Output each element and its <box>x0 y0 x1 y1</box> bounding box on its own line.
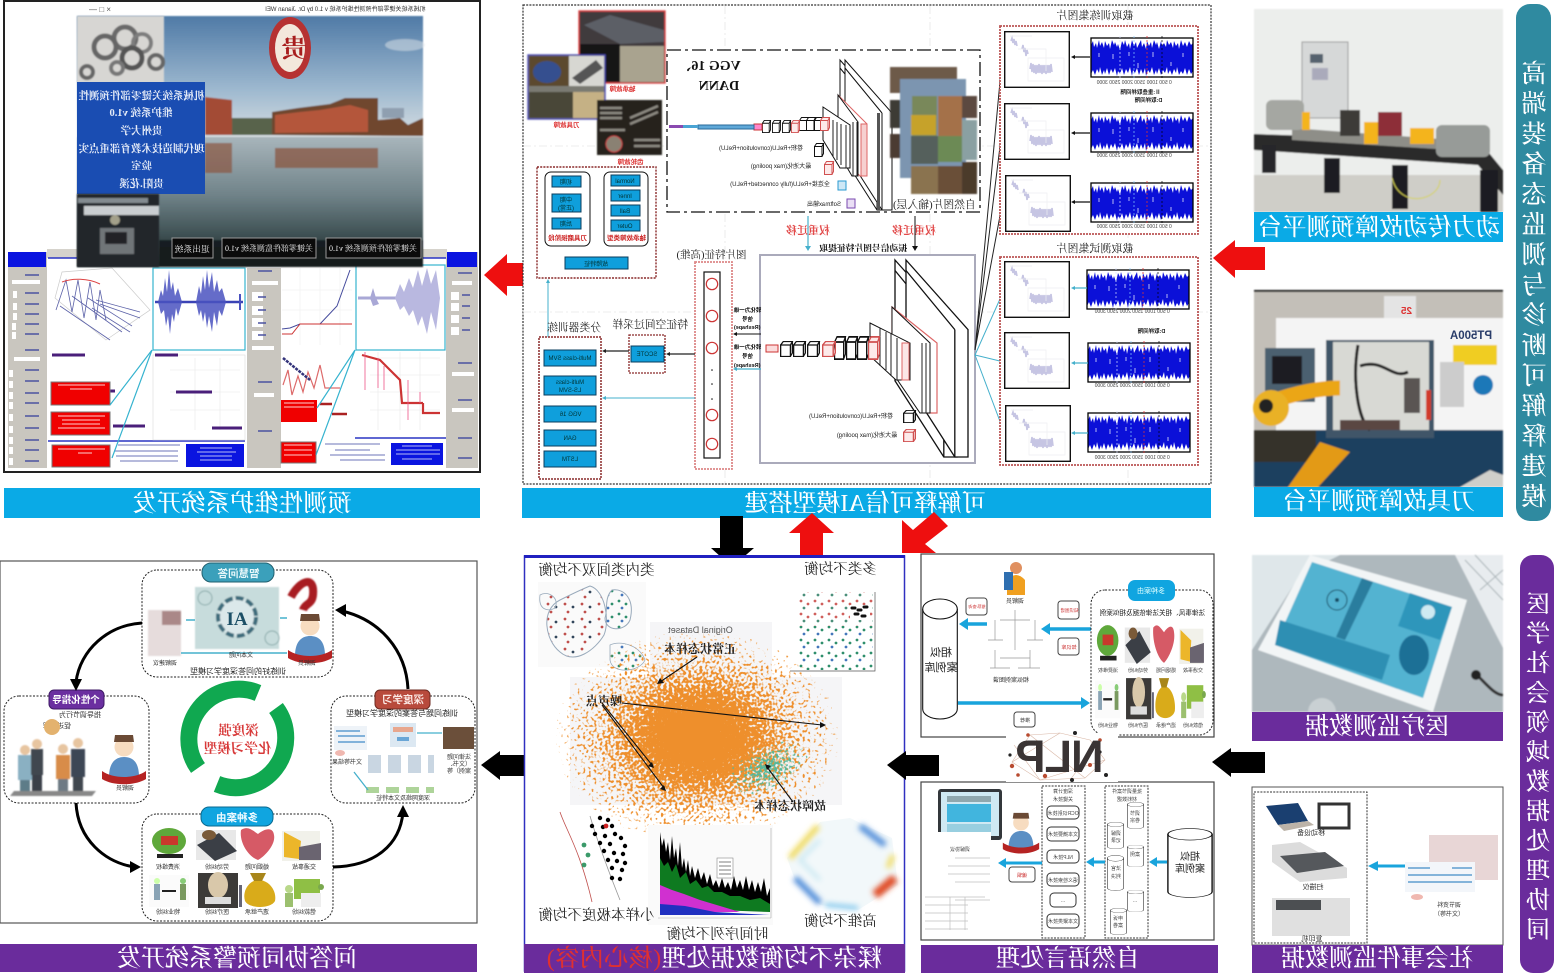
sidebar: equipment monitoring: 测 <box>1521 241 1546 269</box>
reshape labels: 信号 <box>741 352 753 360</box>
title block: 贵州大学 <box>120 124 162 137</box>
legend: 卷积+ReLU(convolution+ReLU) <box>809 412 893 420</box>
case database cylinder: 相似 <box>1180 850 1200 863</box>
smart Q&A box: 训练好的问答深度学习模型 <box>190 666 286 676</box>
bearing photo <box>77 16 164 83</box>
sidebar: equipment monitoring: 断 <box>1521 332 1546 360</box>
model name <box>677 59 741 94</box>
panel: social event data <box>1252 787 1503 945</box>
scatter plot orange samples <box>555 631 839 843</box>
training set panel: D:取样间隔 <box>1134 96 1162 104</box>
scatter plot background: Original Dataset <box>668 625 733 635</box>
device box: 扫描仪 <box>1302 882 1324 891</box>
model name: VGG 16、 <box>677 59 741 74</box>
remaining life plots <box>50 352 445 440</box>
subplot labels <box>538 906 877 943</box>
cycle arrows <box>70 604 409 873</box>
fault label group: (正常) <box>558 204 574 212</box>
reshape labels: 转化为一维 <box>733 343 761 351</box>
mediator icon <box>1004 562 1025 605</box>
weight transfer labels: 振动信号图片特征提取 <box>819 242 907 253</box>
small sample clusters <box>560 812 627 902</box>
smart Q&A box: 调解员 <box>298 659 316 667</box>
test set panel <box>1000 241 1198 465</box>
smart Q&A box: 智慧问答 <box>217 567 259 580</box>
multiple case types box: 劳动纠纷 <box>205 863 229 871</box>
multi-class scatter <box>790 590 875 671</box>
device box <box>1254 792 1367 943</box>
personalised guidance box: 个性化指导 <box>52 694 100 706</box>
batch data column: 卷宗 <box>1130 817 1140 824</box>
classifier training: Multi-class SVM <box>548 356 592 362</box>
fan connectors to test set <box>975 290 1004 432</box>
scatter annotations: 噪声点 <box>585 693 622 708</box>
sidebar: medical social data: 理 <box>1526 858 1550 884</box>
banner: explainable AI: 可解释可信AI模型搭建 <box>744 490 986 517</box>
smart Q&A box <box>142 563 333 677</box>
case types box: 交通事故 <box>1183 667 1203 674</box>
banner: medical data: 医疗监测数据 <box>1305 713 1449 740</box>
batch data column: 批量调节案件 <box>1112 788 1142 795</box>
sidebar: medical social data: 医 <box>1526 591 1550 618</box>
batch data column: 申诉 <box>1113 915 1123 922</box>
mediation documents: 调节资料 <box>1437 901 1461 909</box>
deep learning box: 深度网络及文本特征 <box>376 794 430 802</box>
sidebar: equipment monitoring: 态 <box>1520 181 1546 209</box>
device box: 移动设备 <box>1297 828 1325 837</box>
weight transfer labels <box>786 216 936 253</box>
sidebar: equipment monitoring: 端 <box>1521 90 1546 118</box>
signal network box <box>760 255 975 463</box>
menu buttons: 关键零部件监测系统 v1.0 <box>225 243 313 253</box>
central reinforcement learning cycle: 深度强 <box>217 722 259 738</box>
batch data column: 材料数据 <box>1117 796 1137 803</box>
fault photo captions: 齿轮故障 <box>617 157 644 166</box>
sidebar: medical social data: 协 <box>1525 887 1550 914</box>
sidebar: medical social data: 会 <box>1526 680 1550 707</box>
window controls: × □ — <box>89 5 111 14</box>
banner: power transmission platform: 动力传动故障预测平台 <box>1258 214 1500 241</box>
case types box: 多种案由 <box>1137 586 1165 595</box>
title block: 贵阳.花溪 <box>119 177 164 190</box>
case database cylinder: 案例库 <box>1175 862 1205 875</box>
title block: 现代制造技术教育部重点实 <box>78 142 204 155</box>
case types box: 法律事风、相关法律依据及相似案例 <box>1099 608 1205 617</box>
smart Q&A box: 调解建议 <box>153 659 177 667</box>
banner: explainable AI <box>522 488 1211 518</box>
image feature column: 图片特征(高维) <box>676 248 746 261</box>
classifier training: LS-SVM <box>559 388 581 394</box>
legend: 全连接+ReLU(fully connected+ReLU) <box>730 180 830 188</box>
photo: medical tablet <box>1252 555 1503 726</box>
scatter plot fault samples <box>720 728 816 808</box>
test set panel: 0 500 1000 1500 2000 2500 3000 <box>1094 309 1170 315</box>
batch data column: 记录 <box>1111 837 1121 844</box>
SCOTE oversampling: SCOTE <box>637 352 657 358</box>
sidebar: equipment monitoring: 备 <box>1521 151 1546 179</box>
mediation documents: （文书等） <box>1434 910 1464 918</box>
arrow: black down <box>711 516 754 567</box>
subplot labels: 小样本极度不均衡 <box>538 906 654 924</box>
sidebar: medical social data: 处 <box>1525 828 1550 855</box>
panel: explainable AI model <box>523 5 1211 484</box>
icon: university seal <box>269 17 311 79</box>
personalised guidance box: 指导调节行为 <box>59 710 101 719</box>
test set panel: 0 500 1000 1500 2000 2500 3000 <box>1094 455 1170 461</box>
training set panel: 0 500 1000 1500 2000 2500 3000 <box>1096 153 1172 159</box>
banner: core content: 糅杂不均衡数据处理(核心内容) <box>546 945 882 972</box>
tag boxes: 知识库 <box>1061 644 1077 651</box>
deep computing techniques: 深度计算 <box>1053 788 1073 795</box>
sidebar: medical social data: 领 <box>1525 709 1550 736</box>
sidebar: equipment monitoring: 与 <box>1521 271 1546 299</box>
inter/intra class clusters <box>538 582 646 670</box>
mediation documents <box>1405 835 1498 918</box>
scatter plot background <box>570 622 842 805</box>
arrow: black to NLP <box>1212 748 1265 777</box>
sidebar: equipment monitoring: 释 <box>1521 422 1546 450</box>
fan connectors to datasets <box>975 60 1002 350</box>
arrow: red to AI model <box>1213 240 1265 278</box>
fault photo captions <box>553 84 644 166</box>
window title: 机械系统关键零部件预测性维护系统 v 1.0 by Dr. Jianan WEI <box>265 5 426 13</box>
banner: tool platform: 刀具故障预测平台 <box>1283 488 1475 515</box>
training set panel: Ⅱ:重叠取样间隔 <box>1120 88 1161 96</box>
reshape labels: 信号 <box>741 315 753 323</box>
classifier training: GAN <box>563 436 577 442</box>
case types box: 劳动纠纷 <box>1128 667 1148 674</box>
sidebar: medical social data: 域 <box>1526 739 1550 766</box>
generated documents <box>925 832 991 936</box>
training set panel: 0 500 1000 1500 2000 2500 3000 <box>1096 224 1172 230</box>
classifier training: 分类器训练 <box>546 320 601 334</box>
legend: 最大池化(max pooling) <box>837 431 897 439</box>
tag boxes: 推荐 <box>1020 717 1030 724</box>
menu buttons: 关键零部件预测系统 v1.0 <box>329 243 417 253</box>
fault label group: 中期 <box>560 196 572 204</box>
batch data column: 调节 <box>1130 810 1140 817</box>
blue flow arrows <box>998 857 1167 868</box>
multiple case types box: 物业纠纷 <box>156 908 180 916</box>
multiple case types box: 遗产继承 <box>245 908 269 916</box>
arrow: red diagonal <box>902 512 948 553</box>
blue flow arrows <box>958 618 1091 709</box>
trend plot <box>281 268 355 350</box>
machine model label: 25 <box>1400 306 1412 317</box>
scatter annotations <box>585 641 826 813</box>
title block: 维护系统 v1.0 <box>110 106 172 119</box>
title block: 机械系统关键零部件预测性 <box>78 89 204 102</box>
fault label group: 轴承故障类型 <box>606 233 646 242</box>
caption: natural images: 自然图片(输入层) <box>893 197 976 211</box>
case types box: 医疗纠纷 <box>1128 722 1148 729</box>
banner: Q&A early warning <box>0 944 477 972</box>
machine model label: PT500A <box>1450 330 1492 342</box>
panel: predictive maintenance system screenshots <box>4 1 480 472</box>
photo: tool fault test machine <box>1253 290 1503 487</box>
sidebar: equipment monitoring: 可 <box>1521 362 1546 390</box>
flow diagram <box>988 610 1043 668</box>
sidebar: equipment monitoring: 高 <box>1521 60 1546 88</box>
classifier training: VGG 16 <box>559 412 581 418</box>
banner: NLP: 自然语言处理 <box>996 945 1140 972</box>
case database cylinder <box>1168 829 1212 897</box>
legend: 最大池化(max pooling) <box>751 162 811 170</box>
fault label group: Inner <box>618 194 632 200</box>
deep computing techniques: … <box>1060 898 1066 904</box>
deep computing techniques: 文本摘要技术 <box>1048 831 1078 838</box>
time series chart <box>648 825 773 925</box>
photo: power transmission test rig <box>1254 9 1503 212</box>
fault label group: Ball <box>620 209 630 215</box>
legend: 卷积+ReLU(convolution+ReLU) <box>719 144 803 152</box>
subplot labels: 时间序列不均衡 <box>666 926 768 943</box>
sidebar: equipment monitoring: 模 <box>1521 483 1546 511</box>
smart Q&A box: 文本问题 <box>229 651 253 659</box>
machine model label <box>1400 306 1492 342</box>
legend <box>809 410 915 442</box>
multiple case types box: 交通事故 <box>292 863 316 871</box>
classifier training <box>539 320 601 479</box>
panel: NLP lower <box>921 782 1214 940</box>
banner: predictive maintenance: 预测性维护系统开发 <box>132 490 352 517</box>
classifier training: LSTM <box>562 457 578 463</box>
fault photo captions: 刀具故障 <box>553 120 580 129</box>
fault label group <box>537 167 656 278</box>
arrow: black to imbalance panel <box>887 751 939 780</box>
panel: imbalanced data processing <box>524 555 905 971</box>
monitor <box>938 789 1002 840</box>
3D surface plot <box>55 268 150 340</box>
tag boxes: 知识图谱 <box>1060 607 1078 614</box>
menu buttons <box>172 238 421 258</box>
software window: lower analysis screen <box>7 240 478 470</box>
legend: Softmax输出 <box>807 200 841 208</box>
case types box: 婚姻问题 <box>1156 667 1176 674</box>
weight transfer labels: 权重迁移 <box>786 223 830 237</box>
test set panel: 0 500 1000 1500 2000 2500 3000 <box>1094 383 1170 389</box>
deep learning box: （文书、 <box>447 760 471 768</box>
deep computing techniques: 语义检索技术 <box>1048 877 1078 884</box>
batch data column: … <box>1132 898 1138 904</box>
batch data column: 调解 <box>1111 830 1121 837</box>
sidebar: equipment monitoring: 装 <box>1521 120 1546 148</box>
personalised guidance box: 促进调解 <box>43 721 71 730</box>
arrow: black to Q&A <box>481 751 533 780</box>
smart Q&A box: IA <box>226 609 248 630</box>
sidebar: equipment monitoring: 诊 <box>1521 302 1546 330</box>
software window: splash screen <box>77 5 426 267</box>
sidebar: medical social data <box>1520 555 1554 973</box>
sidebar: equipment monitoring: 解 <box>1521 392 1546 420</box>
case types box <box>1091 580 1213 735</box>
personalised guidance box: 调解员 <box>116 784 134 792</box>
SCOTE oversampling <box>546 279 695 400</box>
lathe photo <box>77 194 159 267</box>
reshape labels <box>733 306 761 371</box>
sidebar: equipment monitoring: 建 <box>1521 453 1546 481</box>
fault label group: Outer <box>617 224 633 230</box>
deep computing techniques: OCR识别技术 <box>1047 810 1079 817</box>
caption: case graph: 相似案例图谱 <box>993 676 1029 684</box>
multiple case types box: 医疗纠纷 <box>205 908 229 916</box>
vibration signal plot <box>153 268 245 350</box>
mediator icon: 调解员 <box>1006 597 1024 605</box>
batch data column: 案卷 <box>1113 922 1123 929</box>
deep computing techniques <box>1042 786 1085 938</box>
high-dimensional manifold <box>787 818 898 910</box>
red warning boxes <box>51 382 317 467</box>
campus photo <box>77 16 425 267</box>
sidebar: medical social data: 学 <box>1526 621 1550 648</box>
fault label group: 初期 <box>560 178 572 186</box>
case types box: 遗产继承 <box>1156 722 1176 729</box>
deep learning box: 法律问题 <box>447 753 471 761</box>
blue info boxes <box>186 443 443 467</box>
network layers <box>669 60 892 210</box>
zoom connector lines <box>110 350 355 458</box>
banner: medical data <box>1252 712 1503 741</box>
training set panel <box>1000 8 1198 234</box>
menu buttons: 退出系统 <box>174 243 210 254</box>
scatter annotations: 正常状态样本 <box>664 641 736 656</box>
banner: NLP <box>921 945 1218 973</box>
reshape labels: (Reshape) <box>734 325 760 331</box>
batch data column: 法官 <box>1111 865 1121 872</box>
multiple case types box: 消费维权 <box>156 863 180 871</box>
deep learning box: 训练问题与答案的深度学习模型 <box>346 708 458 718</box>
VGG DANN network <box>667 50 980 212</box>
subplot labels: 高维不均衡 <box>804 912 877 930</box>
training set panel: 截取训练集图片 <box>1056 8 1134 22</box>
panel: NLP upper <box>921 554 1214 737</box>
arrow: red to maintenance system <box>484 254 538 296</box>
case types box: 消费维权 <box>1098 667 1118 674</box>
case database cylinder <box>923 599 958 719</box>
case types box: 物业纠纷 <box>1098 722 1118 729</box>
sidebar: medical social data: 社 <box>1526 650 1550 677</box>
tag boxes <box>966 598 1079 727</box>
icon: university seal: 贵 <box>277 35 306 63</box>
sidebar: medical social data: 同 <box>1526 918 1550 944</box>
case database cylinder: 相似 <box>930 646 952 659</box>
sidebar: equipment monitoring: 监 <box>1521 211 1546 239</box>
mediator <box>1003 813 1039 854</box>
info text stripes <box>114 444 385 461</box>
scatter annotations: 故障状态样本 <box>754 798 826 813</box>
model name: DANN <box>699 79 739 94</box>
fault label group: Normal <box>615 179 635 185</box>
fault label group: 后期 <box>560 220 572 228</box>
deep computing techniques: NLP技术 <box>1053 854 1073 861</box>
sidebar: medical social data: 数 <box>1526 769 1550 796</box>
deep learning box: 深度学习 <box>382 693 424 706</box>
deep computing techniques: 文本聚类技术 <box>1048 918 1078 925</box>
sidebar: equipment monitoring <box>1516 4 1551 521</box>
classifier training: Multi-class <box>556 380 584 386</box>
class imbalance headings: 类内类间双不均衡 <box>538 561 654 579</box>
panel: question answering system <box>0 561 477 923</box>
SCOTE oversampling: 特征空间过采样 <box>612 317 688 331</box>
deep learning box: 文书等结果 <box>332 758 362 766</box>
deep computing techniques: 关键技术 <box>1053 796 1073 803</box>
banner: social data: 社会事件监测数据 <box>1281 945 1473 972</box>
case database cylinder: 案例库 <box>924 660 958 674</box>
arrow: red up <box>789 513 834 562</box>
fault label group: 刀具磨损阶段 <box>548 233 587 242</box>
fault photos <box>528 11 665 155</box>
generated documents: 调解协议 <box>950 846 970 853</box>
deep learning box <box>331 690 475 803</box>
banner: Q&A early warning: 问答协同预警系统开发 <box>117 945 357 972</box>
central reinforcement learning cycle <box>189 689 286 788</box>
test set panel: 截取测试集图片 <box>1056 241 1134 255</box>
class imbalance headings: 多类不均衡 <box>804 560 877 578</box>
multiple case types box: 多种案由 <box>216 811 258 824</box>
central reinforcement learning cycle: 化学习模型 <box>203 740 271 756</box>
tag boxes: 推荐/查询 <box>968 603 986 609</box>
weight transfer labels: 权重迁移 <box>892 223 936 237</box>
case types box: 借款纠纷 <box>1183 722 1203 729</box>
batch data column: 案例 <box>1130 851 1140 858</box>
legend <box>719 144 855 208</box>
deep learning box: 案例）等 <box>447 767 471 775</box>
multiple case types box <box>142 807 333 921</box>
edit tag <box>1009 867 1035 882</box>
class imbalance headings <box>538 560 877 579</box>
reshape labels: 转化为一维 <box>733 306 761 314</box>
sidebar: medical social data: 据 <box>1526 798 1550 825</box>
personalised guidance box <box>4 690 149 803</box>
banner: predictive maintenance <box>4 488 480 518</box>
reshape labels: (Reshape) <box>734 363 760 369</box>
title block <box>77 82 205 194</box>
fault label group: 故障特征 <box>584 260 608 268</box>
multiple case types box: 婚姻问题 <box>245 863 269 871</box>
training set panel: 0 500 1000 1500 2000 2500 3000 <box>1096 80 1172 86</box>
device box: 复印机 <box>1302 934 1322 943</box>
title block: 验室 <box>130 159 152 172</box>
NLP logo: NLP <box>1016 731 1104 782</box>
batch data column: 判决 <box>1111 873 1121 880</box>
image feature column <box>676 248 746 469</box>
blue arrow to devices <box>1368 861 1408 871</box>
edit tag: 编辑 <box>1017 872 1027 879</box>
natural image collage <box>890 67 977 194</box>
banner: tool platform <box>1254 487 1503 517</box>
batch data column <box>1105 786 1148 938</box>
multiple case types box: 借款纠纷 <box>292 908 316 916</box>
signal plot right <box>356 265 445 350</box>
fault photo captions: 轴承故障 <box>609 84 636 93</box>
test set panel: D:取样间隔 <box>1137 327 1165 335</box>
